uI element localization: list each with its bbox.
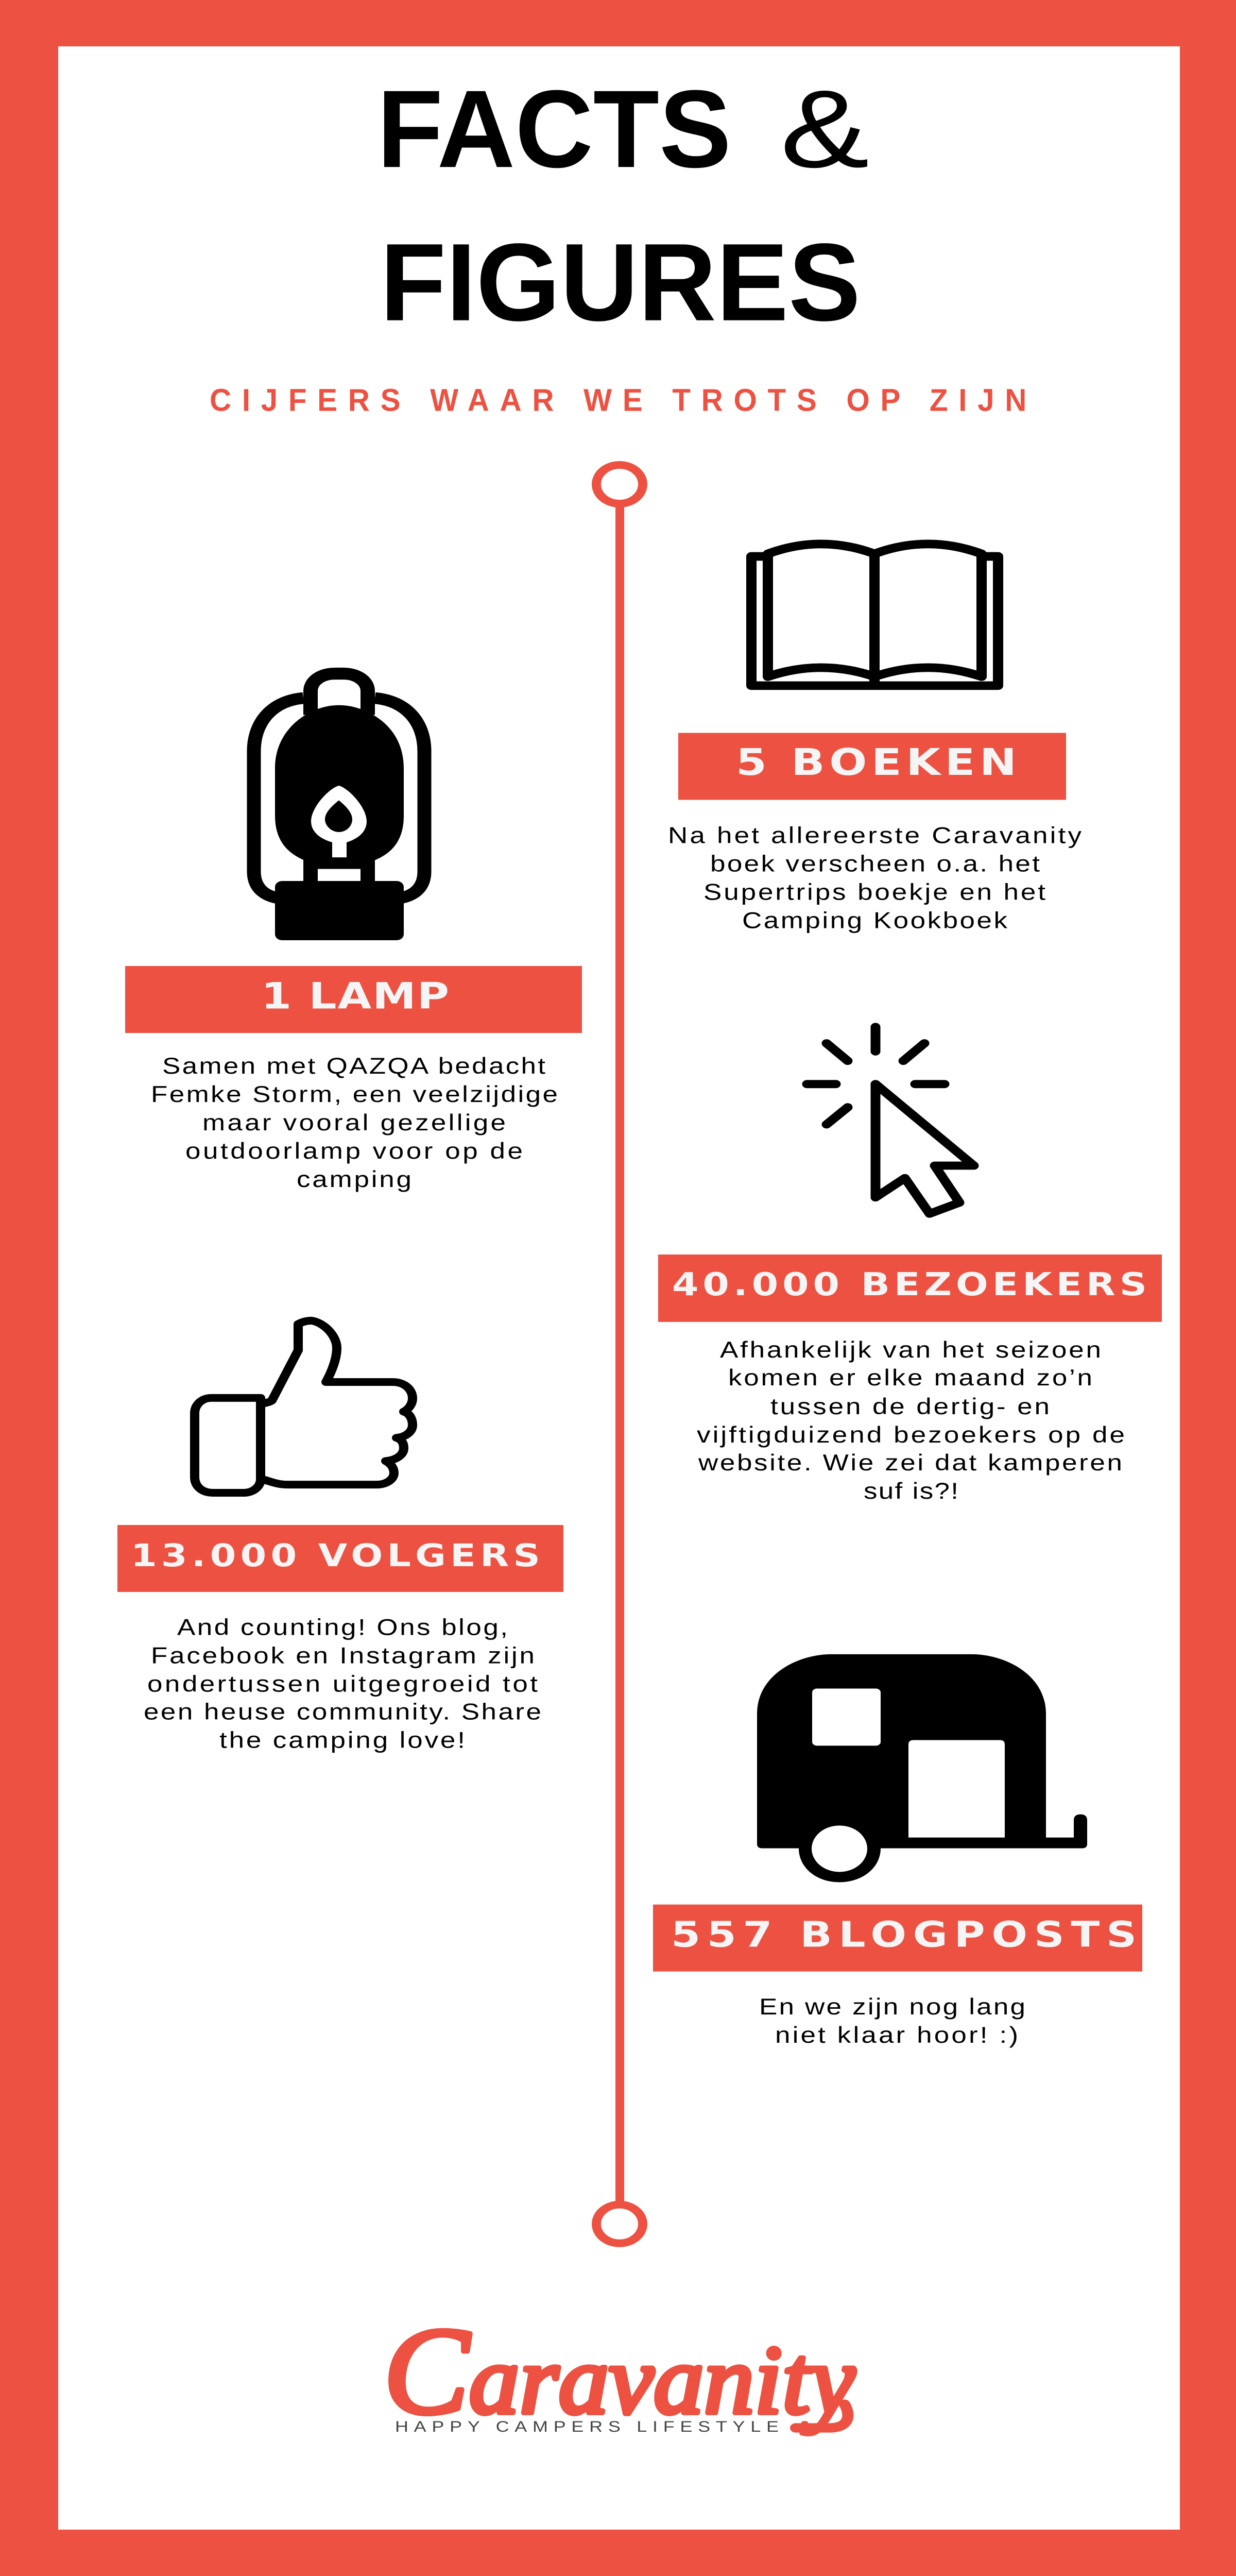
text: volgers description: een heuse community. Share — [144, 1700, 541, 1724]
text: lamp description: Samen met QAZQA bedacht — [162, 1054, 545, 1079]
text: lamp description: camping — [297, 1167, 411, 1192]
text: bezoekers description: vijftigduizend bezoekers op de — [697, 1422, 1125, 1448]
banner: 13.000 volgers: 13.000 VOLGERS — [131, 1537, 540, 1573]
text: volgers description: ondertussen uitgegroeid tot — [147, 1671, 538, 1697]
text: volgers description: the camping love! — [219, 1728, 465, 1753]
text: blogposts description: En we zijn nog lang — [759, 1994, 1025, 2020]
icon: lantern — [254, 674, 424, 940]
title — [377, 67, 869, 344]
text: blogposts description — [759, 1994, 1025, 2048]
text: lamp description: maar vooral gezellige — [202, 1110, 506, 1136]
title: & — [780, 67, 869, 191]
icon: book — [751, 544, 998, 686]
logo: Caravanity: Caravanity — [384, 2302, 855, 2440]
icon: caravan — [757, 1654, 1087, 1882]
text: volgers description — [144, 1615, 541, 1753]
text: lamp description: Femke Storm, een veelzijdige — [151, 1082, 558, 1107]
banner: 5 boeken: 5 BOEKEN — [736, 741, 1017, 784]
text: bezoekers description: Afhankelijk van het seizoen — [720, 1337, 1101, 1363]
icon: thumbs up — [195, 1320, 413, 1493]
text: boeken description: Camping Kookboek — [742, 908, 1008, 934]
banner: 1 lamp — [125, 966, 582, 1033]
text: boeken description: boek verscheen o.a. het — [710, 852, 1040, 877]
text: bezoekers description: tussen de dertig- en — [770, 1394, 1050, 1419]
icon: cursor click — [807, 1027, 974, 1214]
text: boeken description — [668, 823, 1082, 934]
subtitle: CIJFERS WAAR WE TROTS OP ZIJN — [210, 382, 1026, 418]
text: blogposts description: niet klaar hoor! :) — [775, 2023, 1018, 2048]
banner: 5 boeken — [678, 733, 1066, 800]
banner: 40.000 bezoekers — [658, 1255, 1162, 1322]
logo: Caravanity: HAPPY CAMPERS LIFESTYLE — [395, 2418, 779, 2435]
text: lamp description — [151, 1054, 558, 1192]
banner: 1 lamp: 1 LAMP — [261, 975, 449, 1018]
title: FIGURES — [380, 221, 861, 344]
text: bezoekers description — [697, 1337, 1125, 1504]
text: bezoekers description: website. Wie zei dat kamperen — [698, 1450, 1122, 1476]
timeline — [596, 465, 643, 2243]
title: FACTS — [377, 67, 731, 191]
text: volgers description: Facebook en Instagram zijn — [151, 1643, 535, 1668]
banner: 557 blogposts: 557 BLOGPOSTS — [671, 1914, 1137, 1955]
text: boeken description: Na het allereerste Caravanity — [668, 823, 1082, 849]
text: lamp description: outdoorlamp voor op de — [185, 1139, 523, 1164]
banner: 40.000 bezoekers: 40.000 BEZOEKERS — [672, 1266, 1147, 1303]
text: bezoekers description: suf is?! — [864, 1479, 958, 1504]
text: boeken description: Supertrips boekje en het — [703, 880, 1045, 905]
banner: 13.000 volgers — [117, 1525, 563, 1592]
text: bezoekers description: komen er elke maand zo’n — [728, 1365, 1092, 1391]
banner: 557 blogposts — [653, 1905, 1142, 1972]
text: volgers description: And counting! Ons blog, — [177, 1615, 508, 1640]
